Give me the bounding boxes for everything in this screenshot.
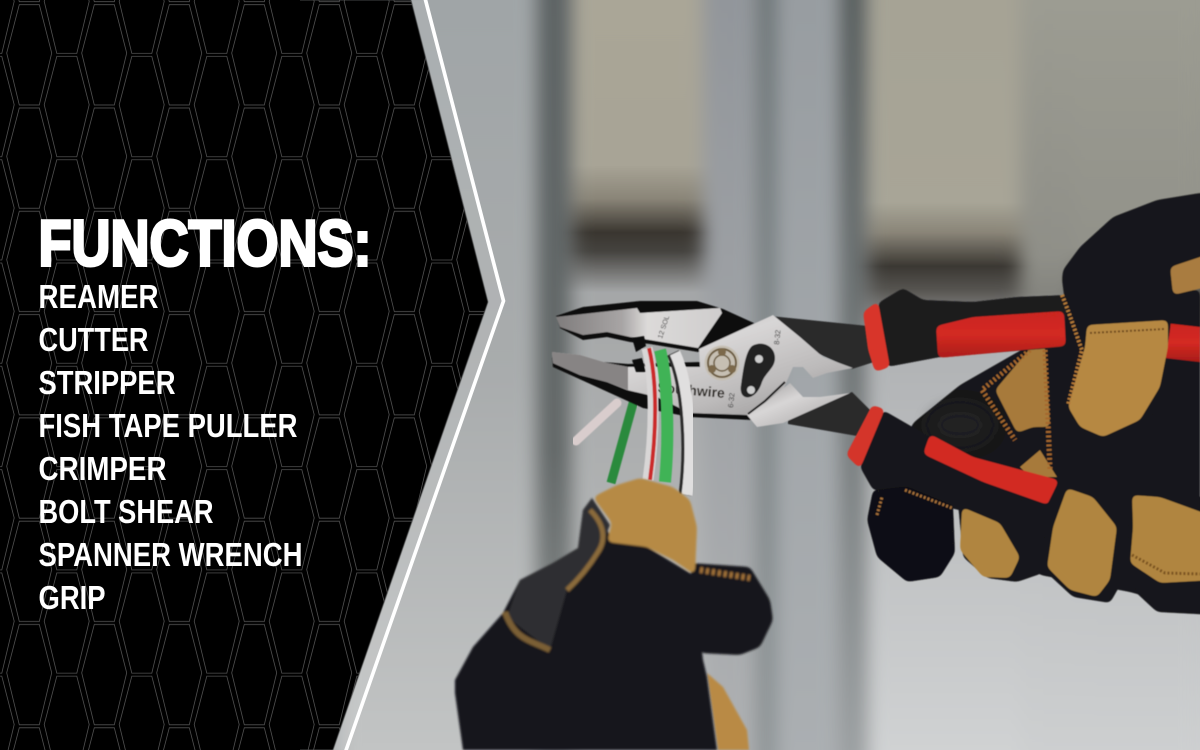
- function list: [38, 278, 302, 616]
- white chevron line: [344, 0, 505, 750]
- wire: bright green: [660, 350, 667, 482]
- palm: [880, 290, 1200, 612]
- left hand holding wires: [455, 478, 773, 750]
- wire: pink stripped: [576, 403, 617, 441]
- pivot plate and lower jaw: [552, 315, 853, 415]
- photo background: blurred grey wall studs: [300, 0, 1200, 750]
- upper handle black grip: [878, 288, 1066, 367]
- tan cuff of left glove: [707, 673, 749, 750]
- function list: BOLT SHEAR: [38, 493, 214, 530]
- size marking: 6-32: 6-32: [726, 392, 737, 408]
- hexagon pattern: [0, 0, 490, 750]
- thumb black knit: [1062, 193, 1200, 437]
- glove body: [455, 498, 717, 750]
- function list: STRIPPER: [38, 364, 176, 401]
- function list: FISH TAPE PULLER: [38, 407, 298, 444]
- function list: CUTTER: [38, 321, 149, 358]
- function list: GRIP: [38, 579, 106, 616]
- lower handle red stripe: [923, 434, 1059, 505]
- thumb tan pad: [1068, 320, 1168, 437]
- finger 3: [1043, 467, 1132, 603]
- upper jaw: [556, 301, 756, 352]
- function list: REAMER: [38, 278, 159, 315]
- upper handle red cap: [863, 301, 890, 372]
- thumb upper tan patch: [1170, 252, 1200, 295]
- finger 1: [867, 486, 955, 582]
- palm tan insert: [995, 345, 1050, 433]
- handle red stripe behind thumb: [1165, 323, 1200, 362]
- palm sheen: [930, 407, 990, 443]
- heading: FUNCTIONS:: [38, 206, 372, 280]
- pivot logo: [704, 346, 740, 380]
- wire: dark green rear: [611, 400, 634, 483]
- front wires: [632, 336, 690, 495]
- plier shaft: lower: [788, 392, 872, 436]
- right hand holding pliers: [846, 193, 1200, 615]
- pliers: [552, 301, 874, 436]
- function list: CRIMPER: [38, 450, 167, 487]
- stitching: [567, 510, 603, 590]
- palm stitching: [982, 350, 1050, 470]
- tan thumb: [593, 478, 697, 575]
- rear wires: [576, 400, 634, 483]
- lower handle red cap: [846, 405, 885, 469]
- jaw clamp black: [632, 336, 646, 372]
- light strip along panel edge: [333, 0, 503, 750]
- function list: SPANNER WRENCH: [38, 536, 302, 573]
- black panel with hexagon pattern: [0, 0, 490, 750]
- jaw marking: 12 SOL: 12 SOL: [657, 315, 671, 340]
- lower handle black grip: [860, 410, 1057, 503]
- wire: white: [673, 353, 690, 495]
- lower jaw black edge: [552, 358, 760, 420]
- lower cutter jaw: [747, 383, 850, 427]
- glove side finger: [690, 563, 773, 655]
- plier brand text: Southwire: [657, 379, 726, 401]
- size marking: 8-32: 8-32: [772, 329, 783, 345]
- upper handle red stripe: [936, 311, 1066, 358]
- finger 2: [958, 488, 1047, 582]
- glove grey panel: [507, 498, 610, 650]
- pivot cutout: [741, 344, 775, 397]
- wire: white with red stripe: [647, 348, 655, 480]
- plier shaft: upper: [770, 316, 874, 369]
- finger 4: [1128, 487, 1200, 615]
